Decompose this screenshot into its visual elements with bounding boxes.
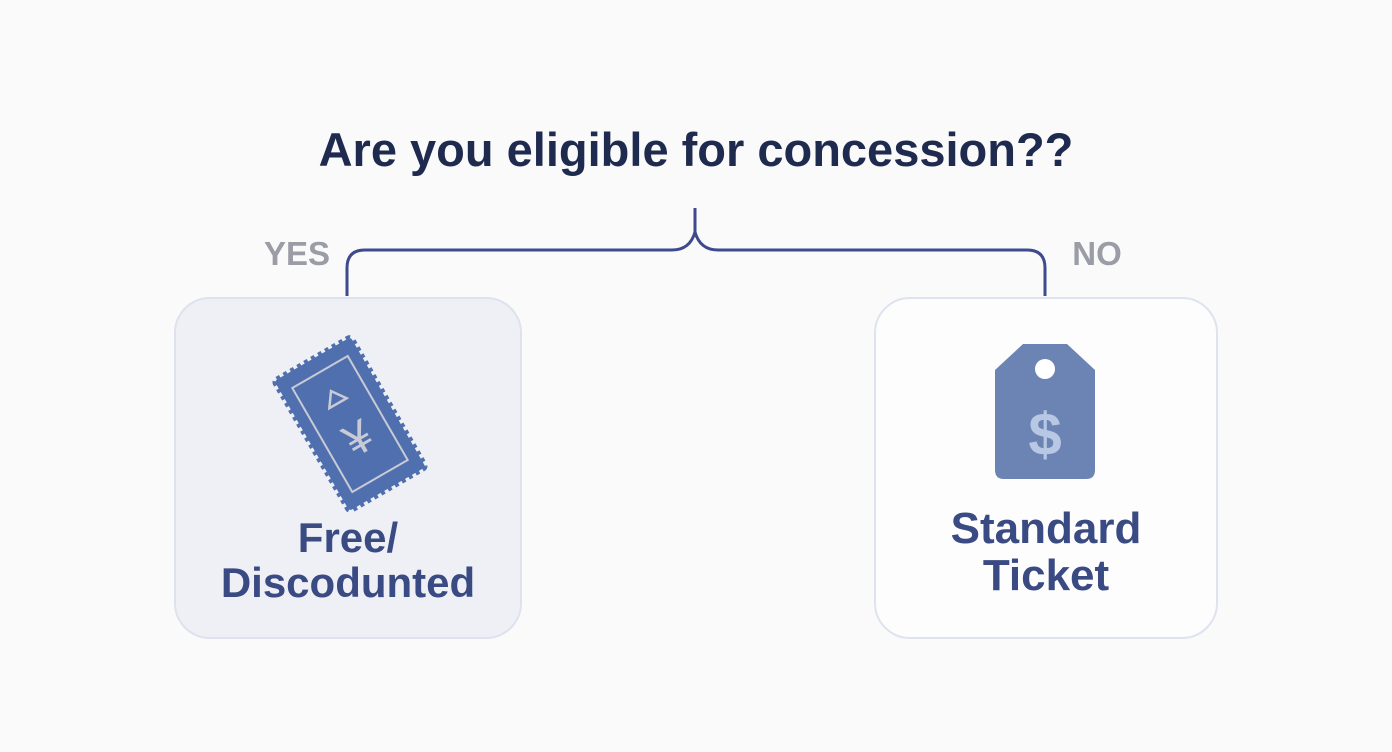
text: Free/Discodunted: Discodunted <box>221 559 475 606</box>
icon: ticket <box>272 335 428 512</box>
icon: price tag <box>995 344 1095 479</box>
panel: standard ticket <box>874 297 1218 639</box>
panel: free/discounted <box>174 297 522 639</box>
icon: price tag: $ <box>1028 401 1062 468</box>
text: Standard Ticket <box>951 504 1141 600</box>
text: Standard Ticket: Ticket <box>983 551 1109 600</box>
label: YES: YES <box>264 235 330 272</box>
text: Free/Discodunted: Free/ <box>298 514 398 561</box>
text: Free/Discodunted <box>221 514 475 606</box>
icon: ticket: ¥ <box>333 409 382 467</box>
text: Standard Ticket: Standard <box>951 504 1141 553</box>
label: NO: NO <box>1072 235 1122 272</box>
title: Are you eligible for concession?? <box>319 123 1073 176</box>
